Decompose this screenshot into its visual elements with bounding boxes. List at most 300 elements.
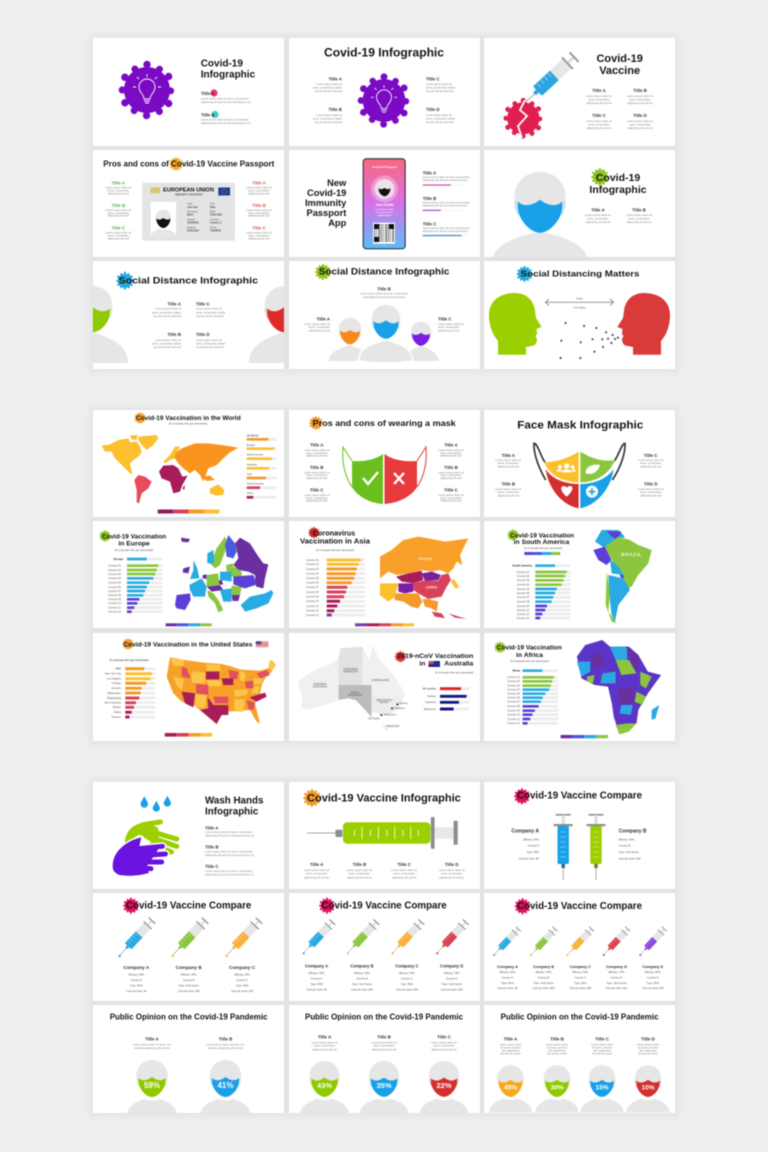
text block: company B: Efficacy: 94% [619, 837, 635, 841]
text blocks: Title A [205, 825, 219, 830]
text block: cons: Lorem ipsum dolor sit [246, 186, 272, 190]
text blocks: adipiscing elit sed do [586, 220, 611, 224]
text blocks: companies: Type: RNA [130, 984, 143, 988]
text blocks: Lorem ipsum dolor sit [438, 493, 464, 497]
people with percentages: 30% [550, 1085, 564, 1092]
bar chart: countries: Country 10 [108, 601, 122, 605]
text blocks: companies: Cost per dose: $30 [569, 986, 592, 990]
text block: company B [619, 829, 647, 860]
text block: left titles: Title A [328, 76, 343, 82]
map labels: WESTERN [313, 682, 327, 686]
title: Infographic [201, 70, 256, 81]
text blocks: companies: Country E [647, 975, 659, 979]
text blocks: sit amet, consect [500, 1046, 521, 1050]
bar chart: countries: South America [512, 564, 532, 568]
text blocks: amet, consectetur [314, 1044, 335, 1048]
text blocks: companies: Efficacy: 78% [444, 971, 460, 975]
text blocks: companies: Country B [538, 975, 550, 979]
subtitle: (% of people who get vaccinated) [510, 659, 549, 663]
text blocks: four titles: adipiscing elit sed do [628, 126, 653, 130]
text blocks: four titles: adipiscing elit sed do [587, 101, 612, 105]
text block: pros: adipiscing elit sed [108, 236, 129, 240]
map labels: NEW SOUTH [376, 698, 392, 702]
bar chart: countries: Country 07 [306, 585, 319, 589]
people with percentages: 22% [436, 1081, 452, 1090]
text blocks: four titles: amet, consectetur [629, 122, 651, 126]
bar chart: cities [422, 687, 470, 711]
icon: title splat [134, 412, 145, 424]
text blocks: Lorem ipsum dolor [591, 1043, 613, 1047]
text blocks: adipiscing elit sed [309, 328, 331, 332]
icon: title splat [122, 638, 133, 650]
map labels: TASMANIA [386, 724, 400, 728]
panel: covid-19 vaccine [484, 38, 675, 146]
text blocks: ing elit sed do eiusmod [154, 345, 181, 349]
passport card: 01/01/2022 [187, 230, 200, 233]
text blocks: companies: Type: RNA [647, 981, 659, 985]
text blocks: Title A [145, 1037, 159, 1042]
text blocks: four titles: amet, consectetur [588, 97, 610, 101]
text blocks: Title B [501, 482, 516, 487]
text blocks: Lorem ipsum dolor sit amet, consectetur [360, 292, 408, 296]
title: in [419, 661, 425, 668]
bar chart: regions [247, 434, 277, 497]
passport card: John Doe [187, 206, 199, 209]
progress items: Lorem ipsum dolor sit amet consectetur [423, 175, 470, 179]
text blocks: four titles: adipiscing elit sed do [587, 126, 612, 130]
title: 2019-nCoV Vaccination [397, 653, 473, 660]
text blocks: Title A [167, 301, 182, 306]
text blocks: Lorem ipsum dolor sit amet, con [206, 1042, 245, 1046]
text blocks: elit sed do eiusm [547, 1052, 568, 1056]
text blocks: companies: Efficacy: 95% [500, 970, 516, 974]
text blocks: four titles: amet, consectetur [629, 97, 651, 101]
text blocks: sed adipiscing elit sed do eiusmod [364, 295, 405, 299]
text blocks: Lorem ipsum dolor [637, 1043, 659, 1047]
bar chart: countries: Country 10 [306, 599, 319, 603]
people with percentages [300, 1061, 468, 1114]
passport card: Country X [210, 222, 222, 225]
text blocks: companies: Efficacy: 90% [399, 971, 415, 975]
text blocks: Lorem ipsum dolor sit [304, 868, 330, 872]
icon: title splat [116, 272, 133, 290]
text block: pros: amet, consectetur [108, 211, 129, 215]
text blocks: Title D [196, 332, 210, 337]
text blocks: elit sed do eiusm [592, 1052, 613, 1056]
bar chart: countries [512, 564, 570, 620]
legend [524, 552, 560, 555]
bar chart: cities: New York City [105, 672, 122, 676]
legend [166, 623, 212, 626]
text blocks: Lorem ipsum dolor sit amet, con [133, 1042, 172, 1046]
bar chart: countries: Country 11 [108, 606, 121, 610]
passport card: ID No [210, 225, 217, 229]
bar chart: countries [507, 668, 558, 725]
text blocks: companies: Company A [123, 965, 150, 970]
bar chart: countries: Country 11 [508, 717, 521, 721]
text blocks: four titles: Lorem ipsum dolor sit [627, 119, 653, 123]
people with percentages [127, 1060, 250, 1115]
text blocks: adipiscing elit sed [306, 454, 328, 458]
title [397, 653, 474, 668]
text blocks: amet, consectetur [433, 1044, 455, 1048]
text blocks: Title B [632, 208, 647, 213]
title: Pros and cons of Covid-19 Vaccine Passport [103, 160, 275, 169]
passport card: Sex [210, 201, 215, 205]
bar chart: regions: Australia [247, 462, 257, 466]
text blocks: four titles: Lorem ipsum dolor sit [586, 119, 612, 123]
people with percentages [489, 1065, 670, 1112]
panel: vaccination in the united states [93, 633, 284, 741]
text blocks: adipiscing elit sed do [392, 875, 417, 879]
text blocks: companies: Cost per dose: $20 [178, 989, 200, 993]
text block: title B: Title B [201, 112, 215, 118]
text blocks: Lorem ipsum dolor sit [438, 448, 464, 452]
text block: left titles: ing elit sed do eiusmod [314, 120, 342, 124]
text blocks [304, 286, 464, 332]
bar chart: cities [104, 667, 155, 719]
panel: vaccine compare four companies [289, 893, 480, 1001]
text blocks: Title A [310, 443, 324, 448]
bar chart: cities: Houston [111, 686, 122, 690]
progress items [423, 171, 470, 236]
text block: cons: adipiscing elit sed [248, 236, 270, 240]
panel: wash hands infographic [93, 782, 284, 889]
text blocks: Lorem ipsum dolor sit [155, 338, 181, 342]
text blocks: Title D [445, 862, 459, 867]
text blocks: Title B [377, 1035, 392, 1040]
text block: right titles: amet, consectetur adipis [426, 86, 456, 90]
map labels: AUSTRALIA [313, 684, 327, 688]
icon: broken red virus [503, 98, 542, 139]
text blocks: four titles: Title B [633, 88, 648, 93]
map: south america: BRAZIL [621, 552, 642, 557]
text blocks: companies: Cost per dose: $10 [605, 986, 628, 990]
passport card: Birth [210, 209, 216, 213]
bar chart: countries: Country 05 [507, 692, 521, 696]
icon: title splat [507, 529, 518, 541]
text blocks: adipiscing elit sed do [347, 875, 372, 879]
text blocks: Lorem ipsum dolor sit [438, 470, 464, 474]
text blocks: elit sed do eiusm [500, 1052, 521, 1056]
phone with qr code: adipiscing elit [378, 214, 391, 217]
title: Social Distancing Matters [521, 269, 640, 279]
text blocks: companies: Company A [305, 964, 328, 969]
title: Covid-19 [596, 53, 643, 65]
people with percentages: 59% [144, 1081, 160, 1090]
text blocks: adipiscing elit sed do eiusmod tempor inc [205, 833, 255, 837]
title: Social Distance Infographic [319, 267, 449, 277]
text blocks: Title B [353, 862, 367, 867]
text blocks: adipiscing elit sed do [312, 1047, 337, 1051]
text blocks: companies: Cost per dose: $30 [396, 987, 418, 991]
text blocks: Lorem ipsum dolor sit [638, 487, 664, 491]
text block: cons: Title B [252, 203, 267, 208]
map labels: AUSTRALIA [348, 693, 362, 697]
bar chart: cities: All country [422, 687, 437, 691]
bar chart: cities: Phoenix [112, 715, 122, 719]
text blocks: adipiscing elit sed do eiusmod tempor inc [205, 872, 255, 876]
bar chart: countries: Country 10 [507, 713, 521, 717]
phone with qr code: Covid-19 Passport [372, 165, 397, 169]
text blocks: Lorem ipsum dolor sit [304, 493, 330, 497]
text block: pros: amet, consectetur [108, 188, 129, 192]
text blocks: companies [123, 965, 256, 993]
icon: title splat [309, 416, 323, 430]
text blocks: companies: Cost per dose: $20 [351, 987, 374, 991]
bar chart: countries: Country 12 [517, 616, 530, 620]
bar chart: cities: USA [116, 667, 121, 671]
text block: right titles: Title C [426, 76, 440, 82]
text block: right titles: Title D [426, 107, 440, 112]
text block: left titles: Lorem ipsum dolor sit [316, 113, 342, 117]
text block: cons: amet, consectetur [248, 188, 270, 192]
phone with qr code: sit amet, consect [376, 211, 393, 214]
text blocks: companies: Cost per dose: $20 [533, 986, 555, 990]
text blocks: Lorem ipsum dolor [499, 1043, 522, 1047]
title: Passport [307, 208, 346, 218]
text blocks: Title B [377, 286, 392, 291]
text blocks: amet, consectetur [306, 496, 327, 500]
bar chart: countries: Africa [512, 668, 520, 672]
bar chart: countries: Country 06 [108, 585, 122, 589]
passport card: Male [210, 206, 216, 209]
passport card [142, 183, 235, 241]
text blocks: Lorem ipsum dolor sit amet, consectetur [205, 850, 253, 854]
bar chart: countries: Country 06 [507, 696, 521, 700]
title: Pros and cons of wearing a mask [313, 418, 456, 428]
text blocks: four titles: Title C [592, 113, 607, 118]
text block: title A: Lorem ipsum dolor sit amet, consectetur [201, 96, 249, 100]
text blocks: Title C [644, 453, 658, 458]
text blocks: companies: Company D [606, 965, 627, 969]
passport card: Name [187, 214, 194, 217]
text block: cons: adipiscing elit sed [248, 191, 270, 195]
text block: company A: Country A [528, 844, 539, 848]
bar chart: regions: South America [247, 482, 264, 486]
text block: company B: Company B [619, 829, 647, 835]
text blocks: Lorem ipsum dolor sit amet, consectetur [205, 869, 253, 873]
text blocks: four titles: Title A [592, 88, 606, 93]
bar chart: countries: Country 01 [507, 675, 521, 679]
text blocks: companies: Type: RNA [574, 981, 587, 985]
text block: cons: Lorem ipsum dolor sit [246, 208, 272, 212]
text block: title A: Title A [201, 91, 215, 96]
text blocks: companies: Country A [131, 978, 142, 982]
text blocks: amet, consectetur [306, 451, 327, 455]
text blocks: companies: Type: Viral Vector [442, 982, 462, 986]
icon: title splat [315, 264, 331, 280]
text blocks: elit sed do eiusm [638, 1052, 659, 1056]
panel: covid-19 infographic with virus [93, 38, 284, 146]
subtitle: (% of people who get vaccinated) [316, 548, 354, 552]
icon: purple virus with light bulb [119, 61, 174, 119]
title: Immunity [305, 198, 347, 208]
icon: blue syringe [554, 814, 573, 880]
illustration: green and red mask [343, 447, 426, 504]
text blocks [304, 443, 464, 503]
icon: title splat [517, 266, 532, 282]
text blocks: four titles: amet, consectetur [588, 122, 610, 126]
text block: cons: amet, consectetur [248, 211, 270, 215]
title: New [327, 178, 347, 188]
title: Public Opinion on the Covid-19 Pandemic [501, 1012, 659, 1021]
text blocks: Title B [550, 1037, 565, 1042]
text blocks: companies: Cost per dose: $4 [497, 986, 518, 990]
text block: cons [246, 181, 272, 240]
bar chart: countries: Country 11 [306, 604, 319, 608]
map labels: NORTHERN [343, 667, 358, 671]
text blocks: Lorem ipsum dolor sit [304, 470, 330, 474]
bar chart: countries: Country 05 [517, 587, 530, 591]
icons: four syringes [300, 918, 470, 956]
panel: vaccination in south america [484, 521, 675, 628]
text blocks: companies: Country D [446, 976, 458, 980]
text block: right titles: ing elit sed do eiusmod [426, 120, 454, 124]
text blocks: amet, consectetur [441, 872, 462, 876]
bar chart: countries: Country 07 [507, 700, 521, 704]
text blocks [585, 208, 652, 224]
title: Australia [444, 661, 474, 668]
text blocks: adipiscing elit sed do eiusmod tempor inc [205, 853, 255, 857]
bar chart: countries: Country 12 [306, 609, 319, 613]
text blocks: companies: Company B [176, 965, 202, 970]
map: united states [167, 657, 276, 724]
text blocks: companies: Type: Viral Vector [352, 982, 372, 986]
bar chart: countries [108, 557, 162, 614]
phone with qr code: John Smith [375, 203, 394, 207]
bar chart: countries: Country 04 [306, 572, 319, 576]
text blocks: Title C [437, 1035, 452, 1040]
text blocks: amet, consectetur [349, 872, 370, 876]
bar chart: cities: Chicago [111, 681, 122, 685]
text block: right titles: ing elit sed do eiusmod [426, 89, 454, 93]
text blocks: Lorem ipsum dolor sit [196, 307, 222, 311]
text blocks: etur adipiscing [502, 1049, 520, 1053]
text blocks: Lorem ipsum dolor sit [439, 868, 465, 872]
text blocks [312, 1035, 457, 1051]
title: Covid-19 Infographic [324, 46, 444, 60]
text blocks: etur adipiscing [593, 1049, 611, 1053]
map labels: QUEENSLAND [371, 678, 389, 682]
bar chart: countries: Country 05 [108, 581, 122, 585]
panel: social distancing matters [484, 261, 675, 369]
map: asia: RUSSIA [419, 557, 433, 561]
icon: title splat [99, 530, 110, 542]
panel: vaccine infographic with syringe [289, 782, 480, 889]
text blocks: ing elit sed do eiusmod [154, 314, 181, 318]
text blocks: Title A [502, 453, 516, 458]
text blocks: companies: Cost per dose: $15 [642, 986, 664, 990]
icons: five syringes [491, 926, 668, 957]
bar chart: cities: Dallas [114, 710, 122, 714]
title: Social Distance Infographic [118, 275, 258, 286]
icon: title splat [308, 527, 319, 539]
text blocks: adipiscing elit sed do [304, 875, 330, 879]
droplets [560, 322, 619, 359]
bar chart: countries: Country 06 [306, 581, 319, 585]
text blocks: Title C [438, 317, 452, 322]
text blocks: amet, consectetur [306, 872, 327, 876]
bar chart: countries: Country 08 [507, 704, 521, 708]
text blocks: amet, consectetur [640, 461, 661, 465]
icon: title splat [494, 641, 505, 653]
panel: vaccine compare five companies [484, 893, 675, 1001]
text blocks: Lorem ipsum dolor sit [438, 322, 464, 326]
bar chart: countries: Country 04 [108, 576, 122, 580]
text blocks: amet, consectetur [306, 473, 327, 477]
panel: coronavirus vaccination in asia [289, 521, 480, 628]
panel: public opinion four groups [484, 1005, 675, 1113]
title: Covid-19 [596, 172, 640, 184]
icon: purple virus with light bulb [358, 73, 409, 128]
panel: public opinion three groups [289, 1005, 480, 1114]
icons: three syringes [116, 916, 264, 959]
text block: pros: Lorem ipsum dolor sit [105, 208, 131, 212]
text blocks: Lorem ipsum dolor sit [391, 868, 417, 872]
progress items: Lorem ipsum dolor sit amet consectetur [423, 200, 470, 204]
text blocks: companies: Efficacy: 94% [536, 970, 552, 974]
title: in South America [514, 539, 570, 546]
text blocks: amet, consectetur [640, 490, 661, 494]
title: Public Opinion on the Covid-19 Pandemic [110, 1012, 268, 1021]
text blocks: companies: Company B [350, 964, 374, 969]
text blocks: amet, consectetur [438, 325, 459, 329]
text blocks: Lorem ipsum dolor sit [495, 458, 521, 462]
text blocks: Title B [444, 465, 459, 470]
text block: pros: amet, consectetur [108, 234, 129, 238]
panel: vaccination in africa [484, 633, 675, 741]
passport card: IMMUNITY PASSPORT [175, 192, 203, 196]
text blocks: companies: Cost per dose: $15 [441, 987, 463, 991]
icon: title splat [515, 898, 530, 914]
panel: vaccination in the world [93, 410, 284, 517]
text blocks: companies: Type: Viral Vector [606, 981, 627, 985]
icon: title splat [319, 898, 335, 914]
text blocks: sit amet, consect [592, 1046, 612, 1050]
title: Covid-19 [307, 188, 346, 198]
text blocks: etur adipiscing [548, 1049, 566, 1053]
map: south america [593, 530, 652, 623]
text blocks: four titles: Title D [633, 113, 648, 118]
bar chart: countries: Country 09 [507, 709, 521, 713]
text block: right titles [426, 76, 456, 124]
title: Covid-19 Vaccination [510, 532, 574, 539]
text blocks: companies: Efficacy: 94% [354, 971, 371, 975]
panel: public opinion two groups [93, 1005, 284, 1115]
map: australia [298, 645, 405, 732]
text blocks: companies: Company E [642, 965, 664, 969]
panel: vaccination in europe [93, 521, 284, 628]
text block: company B: Type: Viral Vector [619, 850, 639, 854]
text block: left titles: amet, consectetur adipis [313, 86, 343, 90]
illustration: red head [617, 293, 670, 355]
map labels [313, 667, 408, 728]
legend [165, 733, 212, 737]
text blocks: amet, consectetur [628, 216, 650, 220]
passport card: 12345678 [210, 230, 221, 233]
text blocks: companies: Country B [356, 976, 368, 980]
text blocks [499, 1037, 659, 1056]
text block: left titles: Title B [328, 107, 343, 112]
bar chart: countries: Country 02 [517, 574, 530, 578]
text blocks: companies: Cost per dose: $4 [126, 989, 147, 993]
text blocks: etur adipiscing [639, 1049, 657, 1053]
bar chart: cities: Philadelphia [107, 696, 122, 700]
text blocks: Lorem ipsum dolor sit [196, 338, 222, 342]
text blocks: Title A [310, 862, 324, 867]
bar chart: countries: Country 05 [306, 576, 319, 580]
